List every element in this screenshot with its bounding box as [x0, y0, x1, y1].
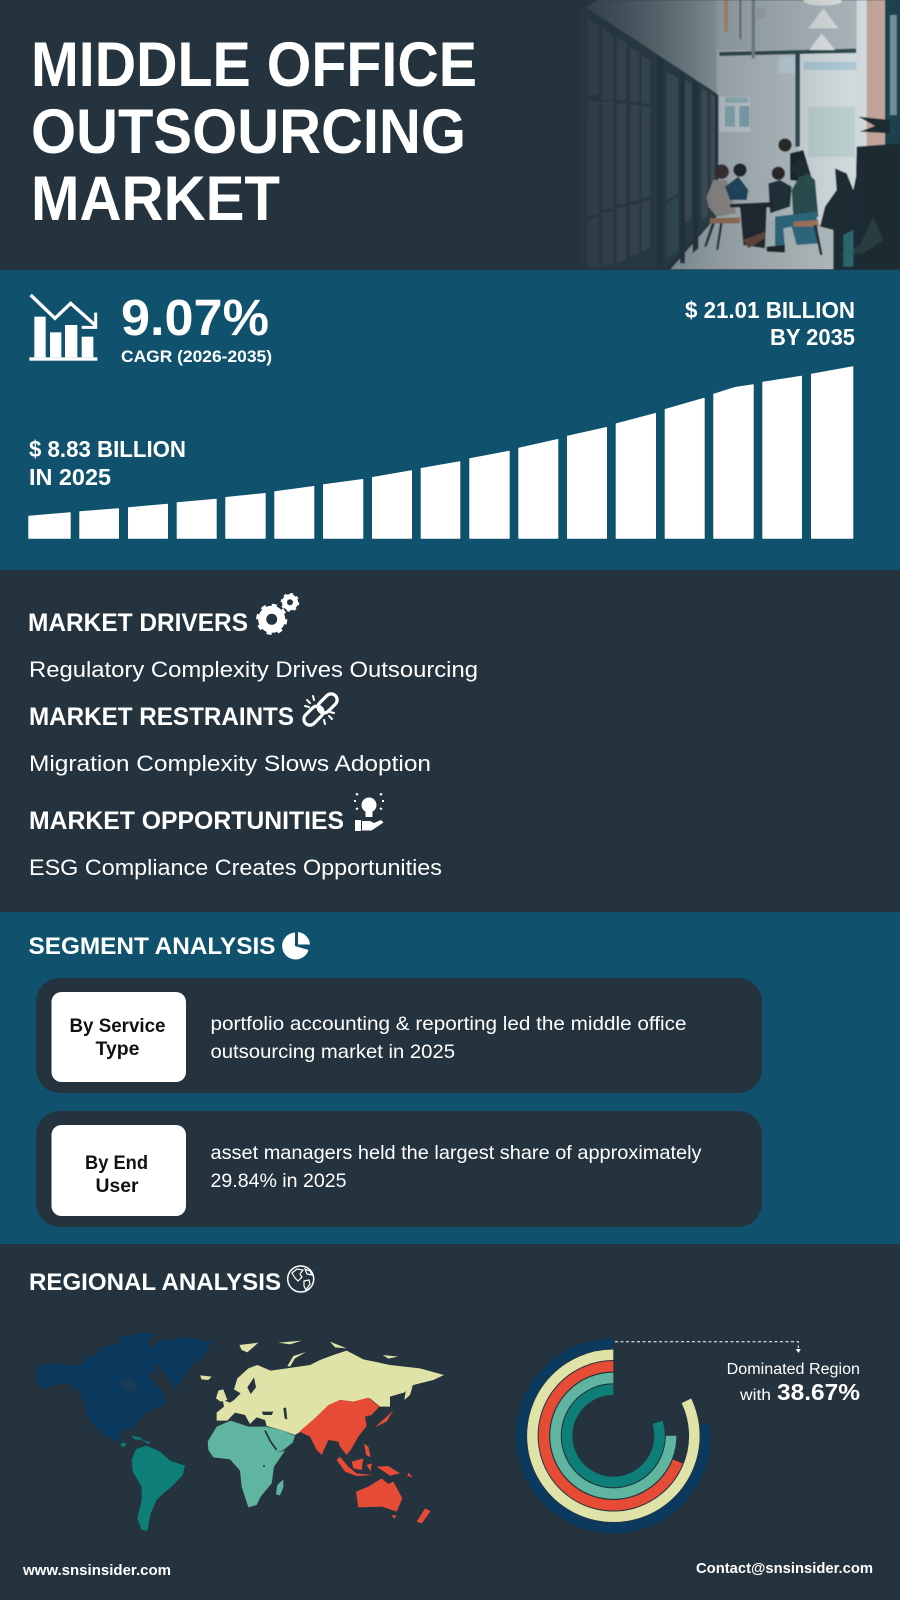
radial bar chart: regional share	[521, 1344, 705, 1528]
heading: market restraints: MARKET RESTRAINTS	[29, 703, 294, 731]
title: MIDDLE OFFICE	[31, 30, 477, 100]
panel: market dynamics	[28, 594, 478, 880]
heading: market opportunities: MARKET OPPORTUNITIES	[29, 807, 344, 835]
header fade overlay	[450, 0, 900, 270]
2025 value: IN 2025	[29, 464, 111, 490]
region: Africa and Middle East	[208, 1421, 295, 1507]
2035 value: BY 2035	[770, 324, 855, 350]
card: by service type	[36, 978, 762, 1093]
region: Europe and North Asia	[200, 1341, 444, 1435]
footer: website: www.snsinsider.com	[22, 1562, 171, 1579]
2035 value: $ 21.01 BILLION	[685, 297, 855, 323]
title: MARKET	[31, 164, 280, 234]
callout: dominated region: with	[739, 1387, 771, 1404]
heading: regional analysis: REGIONAL ANALYSIS	[29, 1269, 281, 1296]
panel: segment analysis	[0, 912, 900, 1244]
card: by service type: By Service	[70, 1015, 166, 1037]
2025 value: $ 8.83 BILLION	[29, 436, 186, 462]
card: by end user: User	[96, 1175, 139, 1197]
2025 value	[29, 436, 186, 490]
arrow: dashed leader to dominated region label	[615, 1342, 801, 1353]
CAGR label: CAGR (2026-2035)	[121, 347, 272, 366]
text: driver: Regulatory Complexity Drives Outsourcing	[29, 657, 478, 682]
card: by end user	[36, 1111, 762, 1227]
title: OUTSOURCING	[31, 97, 466, 167]
Hudson Bay	[122, 1379, 136, 1392]
icon: broken chain link	[301, 691, 340, 728]
CAGR value: 9.07%	[121, 289, 269, 346]
callout: dominated region: Dominated Region	[727, 1361, 860, 1378]
heading: market drivers: MARKET DRIVERS	[28, 609, 248, 637]
title	[31, 30, 477, 234]
panel: header photo of team meeting in office	[587, 0, 900, 270]
footer: contact email: Contact@snsinsider.com	[696, 1560, 873, 1577]
icon: pie chart	[282, 932, 310, 959]
text: restraint: Migration Complexity Slows Adoption	[29, 751, 431, 776]
region: South America	[121, 1436, 185, 1531]
card: by end user: 29.84% in 2025	[210, 1170, 347, 1192]
callout: dominated region: 38.67%	[777, 1379, 860, 1405]
region: Asia Pacific	[299, 1398, 431, 1523]
icon: hand holding light bulb	[354, 794, 384, 831]
region: North America	[36, 1333, 212, 1443]
card: by end user: By End	[85, 1152, 148, 1174]
heading: segment analysis: SEGMENT ANALYSIS	[28, 933, 276, 960]
icon: chart with falling arrow	[29, 295, 97, 361]
world map	[36, 1333, 444, 1531]
card: by service type: Type	[96, 1038, 140, 1060]
text: opportunity: ESG Compliance Creates Opportunities	[29, 855, 442, 880]
icon: gears	[258, 594, 298, 633]
card: by end user: asset managers held the largest share of approximately	[210, 1142, 702, 1164]
panel: market size section	[0, 270, 900, 570]
bar chart: market growth 2025 to 2035	[29, 367, 853, 538]
icon: globe	[288, 1266, 314, 1292]
callout: dominated region	[727, 1361, 860, 1405]
card: by service type: portfolio accounting & reporting led the middle office	[210, 1013, 686, 1035]
card: by service type: outsourcing market in 2025	[210, 1041, 455, 1063]
2035 value	[685, 297, 855, 350]
